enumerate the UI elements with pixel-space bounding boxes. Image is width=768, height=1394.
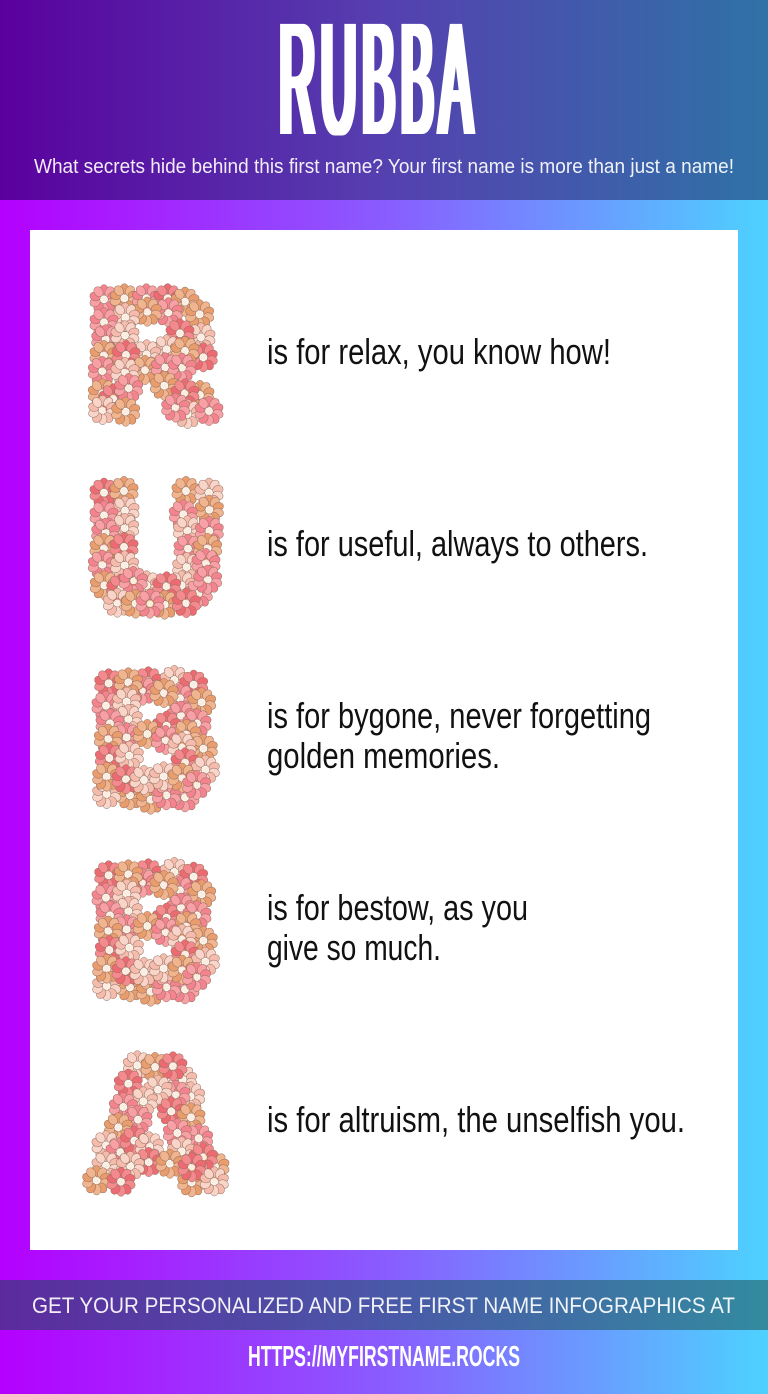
row: letter R	[87, 284, 611, 429]
icon: flower letter U	[87, 476, 225, 619]
row: letter B	[91, 665, 655, 814]
text: B line: golden memories.	[267, 735, 500, 776]
icon: flower letter A	[81, 1051, 230, 1197]
icon: flower letter B second	[91, 857, 221, 1006]
text: A line: is for altruism, the unselfish you.	[267, 1099, 685, 1140]
panel: white content card	[30, 230, 738, 1250]
footer band	[0, 1280, 768, 1330]
row: letter B second	[91, 857, 532, 1006]
text: second B line: give so much.	[267, 927, 441, 968]
icon: flower letter R	[87, 284, 224, 429]
subtitle: What secrets hide behind this first name? Your first name is more than just a name!	[34, 156, 734, 178]
row: letter A	[81, 1051, 685, 1197]
footer call to action: GET YOUR PERSONALIZED AND FREE FIRST NAME INFOGRAPHICS AT	[32, 1293, 735, 1318]
footer url: HTTPS://MYFIRSTNAME.ROCKS	[248, 1341, 520, 1373]
row: letter U	[87, 476, 648, 619]
icon: flower letter B	[91, 665, 221, 814]
text: B line: is for bygone, never forgetting	[267, 695, 651, 736]
text: U line: is for useful, always to others.	[267, 523, 648, 564]
header band	[0, 0, 768, 200]
text: R line: is for relax, you know how!	[267, 331, 611, 372]
text: second B line: is for bestow, as you	[267, 887, 528, 928]
